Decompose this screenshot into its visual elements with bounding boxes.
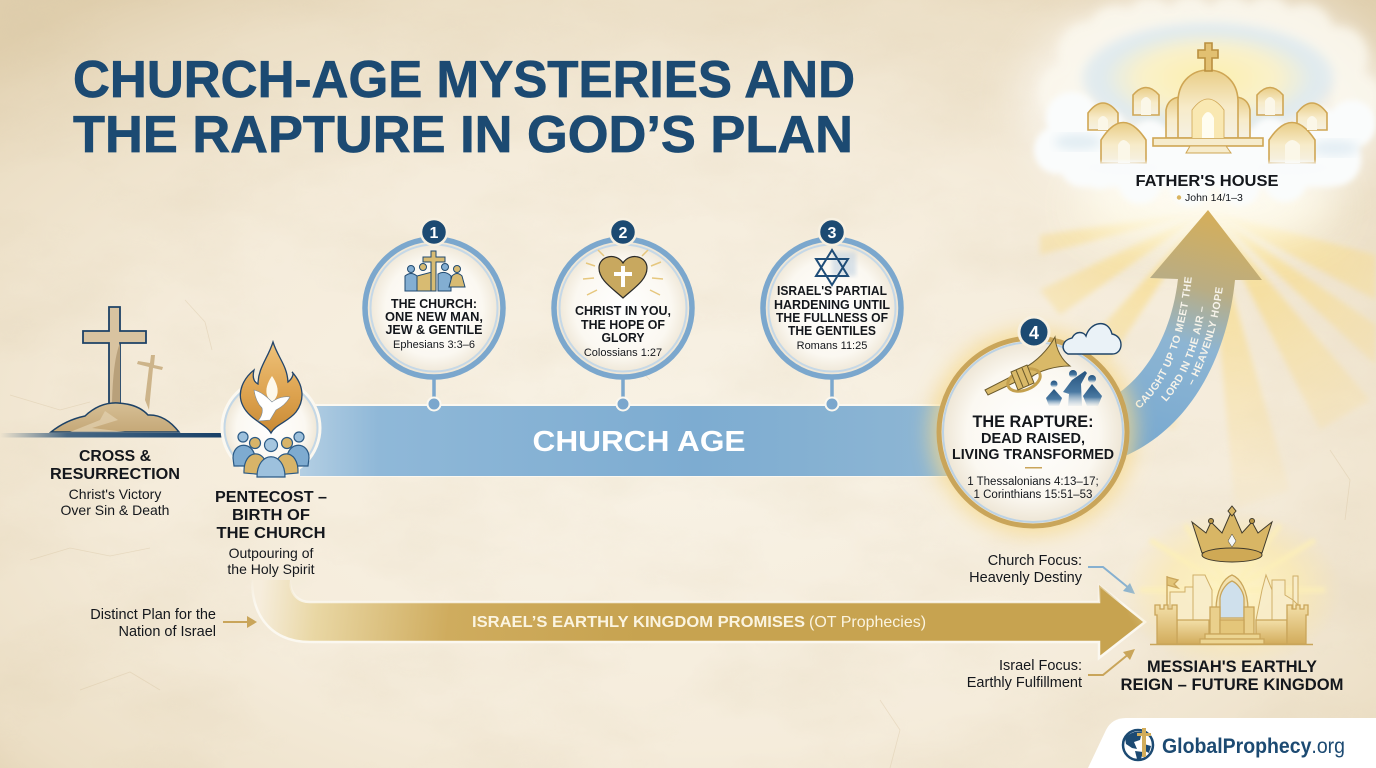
arrow caption: CAUGHT UP TO MEET THE [1136,276,1192,408]
mystery 4: the Rapture: LIVING TRANSFORMED [952,446,1114,463]
text: Christ in you: CHRIST IN YOU, [575,304,671,318]
badge 1 [421,219,447,245]
heading: Pentecost: PENTECOST – [215,489,327,506]
icon: people and cross [405,251,465,291]
Father's House [1023,0,1376,250]
badge 2 [610,219,636,245]
description: Holy Spirit: the Holy Spirit [227,561,315,577]
text: Israel's hardening: ISRAEL'S PARTIAL [777,284,887,298]
title: CHURCH-AGE MYSTERIES AND [73,51,855,109]
light rays behind upward arrow [1040,210,1376,510]
Messiah's Earthly Reign [1120,506,1344,694]
icon: globe with cross [1123,728,1153,760]
mystery 2: Christ in you [554,219,692,410]
Messiah's Earthly Reign: REIGN – FUTURE KINGDOM [1120,675,1344,694]
Cross and Resurrection: RESURRECTION [50,466,180,483]
Church Age band [300,404,960,477]
text: the Church: THE CHURCH: [391,297,477,311]
logo wordmark: GlobalProphecy.org [1162,735,1345,758]
mystery 3: Israel's hardening [763,219,901,410]
mystery 4: the Rapture: 1 Thessalonians 4:13–17; [967,476,1099,488]
heading: Cross and Resurrection: CROSS & [79,448,151,465]
title: THE RAPTURE IN GOD’S PLAN [73,106,853,164]
mystery 2: Christ in you: GLORY [602,331,645,345]
upward curved arrow [1120,210,1262,456]
title [73,51,855,164]
mystery 3: Israel's hardening: THE FULLNESS OF [776,311,888,325]
Pentecost: BIRTH OF [232,507,310,524]
label: Israel focus: Israel Focus: [999,658,1082,674]
mystery 3: Israel's hardening: HARDENING UNTIL [774,298,890,312]
description: Holy Spirit [227,545,315,577]
mystery 1: the Church [365,219,503,410]
icon: star of David [816,250,856,285]
arrow caption: LORD IN THE AIR – [1161,306,1204,402]
badge 4 [1019,317,1049,347]
arrow caption: – HEAVENLY HOPE [1190,287,1223,385]
label: church focus: Heavenly Destiny [969,570,1083,586]
description: Holy Spirit: Outpouring of [229,545,314,561]
text: the Rapture: THE RAPTURE: [972,412,1094,431]
glow and rays [1122,510,1342,670]
mystery 3: Israel's hardening: THE GENTILES [788,324,876,338]
scripture: John 14: John 14/1–3 [1185,192,1243,204]
Israel's kingdom arrow [252,580,1145,658]
label: distinct plan [90,607,257,640]
label: distinct plan: Distinct Plan for the [90,607,216,623]
timeline line [0,433,224,438]
mystery 1: the Church: Ephesians 3:3–6 [393,339,475,351]
icon: crown [1192,506,1272,562]
label: Israel focus [967,649,1135,691]
mystery 1: the Church: JEW & GENTILE [386,323,482,337]
badge 3 [819,219,845,245]
mystery 4: the Rapture [930,317,1136,535]
icon: flame, dove and people [222,342,320,477]
icon: heart with cross [583,250,663,298]
icon: cloud [1063,324,1121,354]
heading: Messiah's Earthly Reign: MESSIAH'S EARTHLY [1147,657,1318,676]
mystery 3: Israel's hardening: Romans 11:25 [797,340,867,352]
badge 4: 4 [1029,323,1039,343]
arrow caption [1136,276,1223,408]
Pentecost [215,342,327,577]
clouds and sky [1023,0,1376,250]
badge 1: 1 [430,225,439,242]
Pentecost: THE CHURCH [216,525,326,542]
mystery 2: Christ in you: THE HOPE OF [581,318,665,332]
Church Age band: CHURCH AGE [532,426,746,458]
heading: Father's House: FATHER'S HOUSE [1136,173,1279,190]
icon: trumpet [985,337,1070,396]
description: Christ's victory [61,486,169,518]
icon: crosses on hill [51,307,179,432]
label: church focus [969,553,1135,594]
mystery 4: the Rapture: 1 Corinthians 15:51–53 [974,489,1092,501]
label: distinct plan: Nation of Israel [118,624,216,640]
icon: heavenly buildings with cross [1088,43,1327,163]
description: Christ's victory: Christ's Victory [69,486,161,502]
mystery 4: the Rapture: DEAD RAISED, [981,430,1085,447]
mystery 1: the Church: ONE NEW MAN, [385,310,483,324]
description: Christ's victory: Over Sin & Death [61,502,169,518]
label: church focus: Church Focus: [988,553,1082,569]
label: Israel focus: Earthly Fulfillment [967,675,1082,691]
mystery 2: Christ in you: Colossians 1:27 [584,347,662,359]
icon: castle and throne [1150,575,1313,644]
icon: rising people [1046,370,1102,406]
Israel's kingdom arrow: ISRAEL’S EARTHLY KINGDOM PROMISES (OT Prophecies) [472,614,926,631]
badge 2: 2 [619,225,628,242]
Cross and Resurrection [50,307,180,518]
logo: GlobalProphecy.org [1088,718,1376,768]
badge 3: 3 [828,225,837,242]
